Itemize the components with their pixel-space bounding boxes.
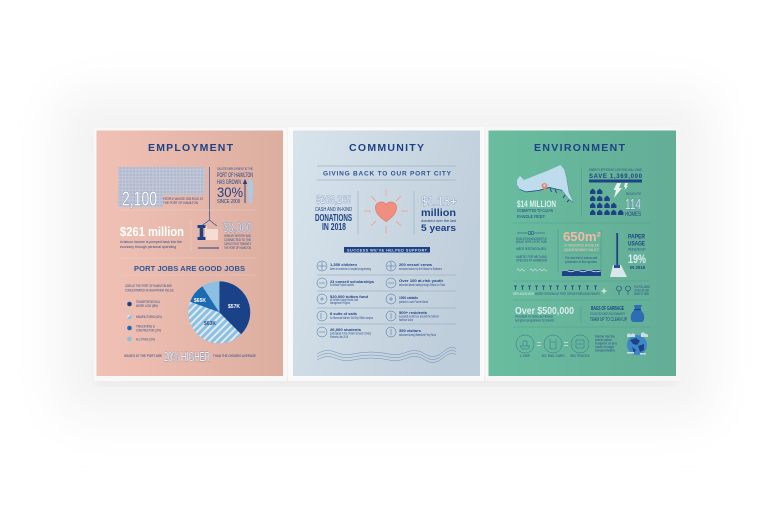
caption: people: PEOPLE WHOSE JOB ROLE AT — [163, 197, 203, 201]
stat: employment growth: HAS GROWN — [217, 180, 241, 186]
success list — [317, 261, 445, 339]
legend: CONSTRUCTION (10%) — [136, 328, 161, 332]
stat: 14 million — [517, 199, 556, 219]
success list: for Bluenose Mariner Tall Ship Office campus — [330, 316, 373, 320]
stat: 14 million: COMMITTED TO CLEAN — [517, 208, 553, 213]
note: emissions: footprint of any — [595, 342, 617, 346]
legend: TRUCKING & — [136, 324, 156, 328]
success list: welcomed during Waterfront Ferry Runs — [399, 333, 436, 337]
transport equivalence: 1 SHIP — [520, 354, 530, 358]
stat: garbage bags — [590, 306, 627, 323]
heading: community: COMMUNITY — [349, 142, 424, 154]
panel: community — [293, 130, 480, 376]
row: icon tally: REPLACED WITH — [513, 292, 535, 296]
stat: 1.18 million: $1.18+ — [421, 194, 457, 208]
stat: 38,000: CARGO THAT TRANSITS — [224, 242, 251, 246]
icon: heart — [364, 189, 408, 234]
legend: WATER LOGS (38%) — [136, 304, 158, 308]
transport equivalence: 301 RAIL CARS — [542, 354, 564, 358]
stat: paper usage: IN 2018 — [630, 265, 645, 270]
success list: 500+ residents — [399, 310, 428, 315]
stat: 2,100: 2,100 — [122, 188, 157, 210]
stat: labour income — [120, 225, 184, 249]
note: bike and habitat text — [516, 232, 548, 271]
stat: garbage bags: BAGS OF GARBAGE — [591, 306, 624, 312]
stat: employment growth: PORT OF HAMILTON — [217, 173, 253, 179]
stat: employment growth: ON-SITE EMPLOYMENT AT THE — [217, 167, 253, 171]
stat: 1.18 million — [421, 194, 457, 233]
note: emissions: transportation — [595, 348, 615, 352]
stat: 500,000: Over $500,000 — [515, 306, 574, 317]
icon: lightning bolts — [614, 183, 628, 198]
success list: 200 vessel crews — [399, 262, 433, 267]
stat: 650 m2: 650m² — [563, 230, 601, 244]
row: icon tally — [513, 285, 650, 296]
stat: garbage bags: COLLECTED SINCE 2015 COMMUNITY — [590, 312, 626, 316]
stat: labour income: in labour income is pumped back into the — [120, 240, 182, 244]
wage note — [124, 349, 256, 364]
row: icon tally: LOCALS AT OUR — [634, 288, 649, 292]
divider — [118, 209, 255, 211]
icon: people grid — [118, 167, 205, 207]
paper frames — [94, 127, 680, 381]
stat: employment growth: 30% — [217, 184, 243, 200]
row: icon tally: YOU FOLLOWED — [634, 285, 650, 289]
icon: houses — [590, 188, 623, 215]
success list: Over 100 at-risk youth — [399, 278, 444, 283]
stat: 38,000 — [223, 219, 252, 250]
caption: people — [163, 197, 203, 205]
stat: paper usage: 19% — [628, 252, 646, 266]
success list: accepted a pilot tour around the harbour — [399, 314, 440, 318]
success list: Kindness Use 2018 — [330, 335, 348, 339]
stat: 650 m2: OF REMEDIATED SHORELINE — [564, 244, 599, 248]
pie chart: $63K — [204, 321, 216, 327]
stat: 38,000: CONNECTED TO THE — [224, 238, 251, 242]
success list: participated in the Ontario Schools' Library — [330, 332, 371, 336]
stat: 650 m2: protection of fish species — [565, 260, 597, 264]
subheading: GIVING BACK TO OUR PORT CITY — [323, 170, 452, 178]
stat: garbage bags: TEAM UP TO CLEAN UP — [590, 317, 627, 323]
row: icon tally: WINES ST. MARK — [634, 292, 649, 296]
success list: Management Program — [330, 301, 350, 305]
success list: for Mohawk Polytech students — [330, 283, 354, 287]
stat: 38,000: THE PORT OF HAMILTON — [224, 246, 251, 250]
row: icon tally: WATER STATIONS AT PORT OFFICES REDUCING WASTE — [535, 292, 600, 296]
success list: 8 suits of sails — [330, 311, 358, 316]
banner: SUCCESS WE'VE HELPED SUPPORT — [347, 248, 428, 252]
note: bike and habitat text: HABITAT FOR WETLAND — [516, 255, 548, 259]
stat: 650 m2 — [562, 230, 601, 276]
stat: 650 m2: QUEENSWAY INLET — [564, 248, 600, 252]
stat: 1.18 million: 5 years — [421, 223, 456, 233]
stat: energy saved — [589, 168, 643, 182]
stat: donations: IN 2018 — [322, 222, 346, 233]
success list: harbour tours — [399, 318, 413, 322]
icon: person — [248, 179, 253, 203]
note: emissions — [595, 334, 617, 352]
stat: paper usage: REDUCED BY — [628, 248, 647, 252]
success list: 1000 cattails — [399, 295, 419, 300]
crane line — [200, 167, 218, 227]
stat: employment growth: SINCE 2009 — [217, 199, 240, 205]
stat: labour income: $261 million — [120, 225, 184, 239]
stat: 114 homes: ENOUGH FOR — [626, 192, 641, 196]
stat: energy saved: ENERGY-EFFICIENT LIGHTING WILL SAVE — [589, 168, 642, 172]
stat: 114 homes — [625, 192, 641, 218]
success list: 23 conseil scholarships — [330, 279, 375, 284]
background glow — [60, 95, 710, 415]
pie chart: $57K — [228, 304, 240, 310]
heading: employment: EMPLOYMENT — [148, 142, 234, 154]
map: randle reef — [517, 165, 573, 203]
legend: MANUFACTURING (42%) — [136, 315, 162, 319]
note: bike and habitat text: SPECIES AT HARBOUR — [516, 258, 548, 262]
legend: CONCENTRATED IN HIGH-PAYING FIELDS: — [125, 288, 174, 292]
banner — [344, 247, 430, 252]
stat: paper usage: USAGE — [628, 240, 645, 248]
stat: paper usage: PAPER — [628, 234, 645, 240]
wave decoration — [317, 347, 456, 363]
stat: 500,000: and green programmes for tenants — [515, 318, 554, 322]
stat: 114 homes: HOMES — [625, 212, 641, 218]
stat: 1.18 million: donated over the last — [421, 219, 457, 223]
success list: 26,000 students — [330, 327, 362, 332]
stat: donations: CASH AND IN-KIND — [315, 207, 352, 213]
success list: planted in Lower Pioneer Marsh — [399, 300, 428, 304]
note: emissions: Marine has the — [595, 334, 615, 338]
note: bike and habitat text: MOUNT HOPE & PORT PARK — [516, 240, 548, 244]
stat: donations — [315, 194, 352, 233]
stat: donations: DONATIONS — [315, 213, 352, 224]
legend: ALL OTHER (10%) — [136, 338, 155, 342]
transport equivalence: 963 TRUCKS — [570, 354, 590, 358]
success list: $20,000 tuition fund — [330, 294, 369, 299]
stat: 38,000: 38,000 — [223, 219, 252, 235]
icon: steel beam — [198, 225, 219, 248]
icon: garbage bag — [631, 305, 644, 322]
stat: 500,000: invested in reduced diesel — [515, 314, 553, 318]
stat: 14 million: $14 MILLION — [517, 199, 556, 209]
stat: 38,000: HOW MY HISTORY AND — [224, 234, 252, 238]
success list: welcomed aboard sailing through Ontario on Track — [399, 283, 445, 287]
success list: taken to museums & hospital programming — [330, 267, 371, 271]
note: bike and habitat text: WILDLIFE ENHANCEMENT AT — [516, 237, 547, 241]
stat: employment growth — [217, 167, 253, 205]
icon: globe — [627, 332, 648, 355]
stat: 14 million: RANDLE REEF — [517, 214, 545, 219]
legend — [125, 284, 174, 342]
wage note: WAGES AT THE PORT ARE — [124, 354, 162, 358]
stat: donations: $268,265 — [316, 194, 351, 206]
stat: 500,000 — [515, 306, 574, 322]
legend: TRANSPORTATION & — [136, 300, 161, 304]
heading: port jobs: PORT JOBS ARE GOOD JOBS — [134, 264, 245, 273]
legend: JOBS AT THE PORT OF HAMILTON ARE — [125, 284, 172, 288]
pie chart — [188, 281, 250, 343]
stat: energy saved: SAVE 1,369,000 — [589, 174, 643, 180]
wage note: 20% HIGHER — [164, 349, 210, 364]
success list: 350 visitors — [399, 328, 422, 333]
icon: arrow up — [243, 180, 247, 203]
stat: paper usage — [628, 234, 647, 270]
success list: welcomed ashore by the Mission to Seafarers — [399, 267, 442, 271]
icon: mop — [610, 233, 627, 277]
note: emissions: lowest carbon — [595, 338, 612, 342]
success list: for Mohawk College Electric Craft — [330, 298, 358, 302]
wage note: THAN THE ONTARIO AVERAGE — [213, 354, 256, 358]
note: bike and habitat text: HABITAT RESTORATION AREA — [516, 247, 547, 251]
panel: environment — [488, 130, 676, 376]
heading: environment: ENVIRONMENT — [534, 142, 626, 154]
stat: labour income: economy through personal spending — [120, 245, 176, 249]
panel: employment — [96, 130, 283, 376]
pie chart: $65K — [194, 298, 206, 304]
stat: 114 homes: 114 — [625, 196, 641, 213]
transport equivalence — [516, 335, 590, 358]
success list: 1,350 children — [330, 262, 358, 267]
stat: 1.18 million: million — [421, 207, 456, 219]
note: emissions: mode of cargo — [595, 345, 614, 349]
caption: people: THE PORT OF HAMILTON — [163, 201, 199, 205]
stat: 650 m2: The new inlet & marina wall — [565, 256, 597, 260]
